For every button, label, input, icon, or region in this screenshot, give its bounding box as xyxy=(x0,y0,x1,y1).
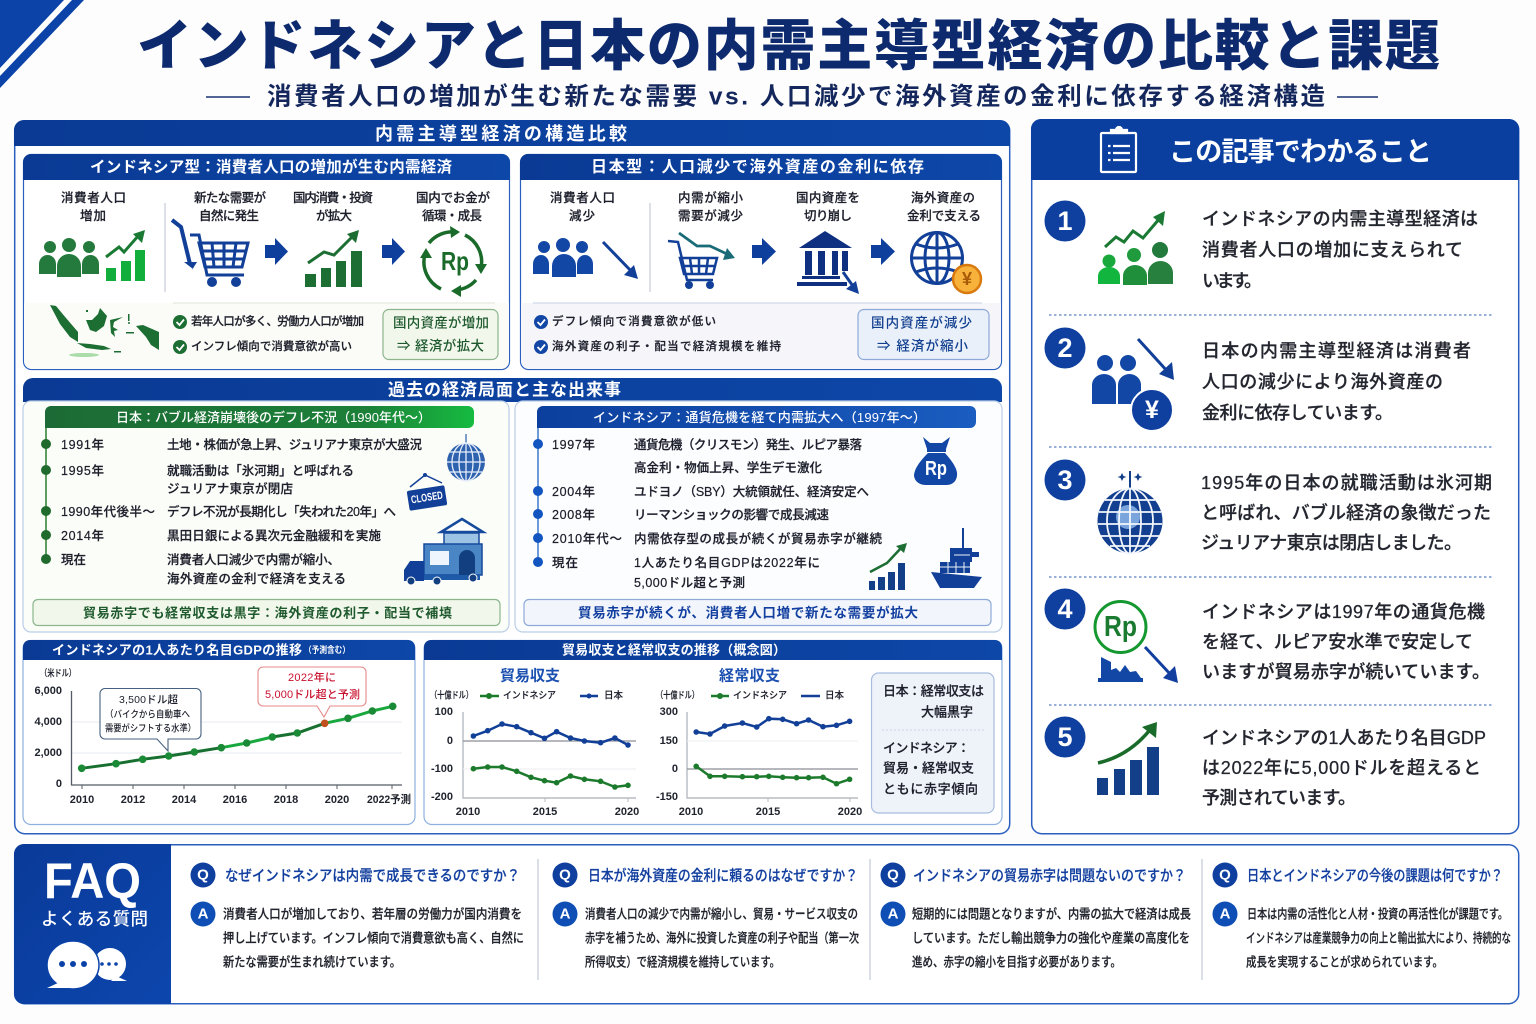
panel: Indonesia timeline xyxy=(515,401,1002,632)
chart: current account: 2010 xyxy=(679,806,703,818)
timeline rows: 5,000ドル超と予測 xyxy=(634,575,745,590)
heading: what you learn xyxy=(1031,119,1519,180)
check list: 若年人口が多く、労働力人口が増加 xyxy=(191,314,364,328)
chart: current account: 150 xyxy=(660,735,678,747)
line chart: 2022予測 xyxy=(367,792,411,806)
timeline rows: 高金利・物価上昇、学生デモ激化 xyxy=(634,460,822,475)
heading: what you learn: この記事でわかること xyxy=(1169,137,1432,167)
timeline rows: 現在 xyxy=(552,555,578,570)
flow labels: 増加 xyxy=(80,208,106,223)
FAQ 3: インドネシアの貿易赤字は問題ないのですか？ xyxy=(913,868,1186,884)
icon: rupiah cycle xyxy=(420,226,487,297)
line chart: 6,000 xyxy=(34,685,62,697)
callout: domestic assets rise: ⇒ 経済が拡大 xyxy=(397,338,484,354)
heading: Japan timeline xyxy=(45,406,474,428)
callout: domestic assets fall xyxy=(858,310,989,360)
heading: balance charts: 貿易収支と経常収支の推移（概念図） xyxy=(562,642,786,658)
callout: chart summary: 貿易・経常収支 xyxy=(883,760,974,776)
icon: clipboard xyxy=(1101,127,1136,172)
FAQ 1 xyxy=(190,862,524,970)
item 1: 1 xyxy=(1057,206,1073,236)
callout: 2022 forecast: 2022年に xyxy=(288,670,336,684)
line chart: 2020 xyxy=(325,794,349,806)
flow labels: 海外資産の xyxy=(911,190,975,205)
callout: chart summary: インドネシア： xyxy=(883,740,970,756)
icon: container ship xyxy=(931,528,982,588)
icon: Indonesia map xyxy=(50,305,159,357)
timeline rows: 1997年 xyxy=(552,438,595,452)
heading: past economic phases xyxy=(23,378,1002,402)
check list xyxy=(173,314,364,354)
icon: rising bars xyxy=(305,230,362,287)
flow labels: 内需が縮小 xyxy=(678,190,743,205)
timeline rows: ジュリアナ東京が閉店 xyxy=(167,481,293,496)
item 5 xyxy=(1044,716,1486,808)
arrow xyxy=(752,238,776,265)
chart: trade balance: 貿易収支 xyxy=(500,666,560,684)
icon: cart with falling line xyxy=(668,233,735,289)
flow labels: が拡大 xyxy=(316,208,352,223)
flow labels: 国内消費・投資 xyxy=(293,190,373,205)
timeline rows: 2010年代～ xyxy=(552,532,622,546)
icon: globe and yen xyxy=(912,232,981,293)
timeline rows: 内需依存型の成長が続くが貿易赤字が継続 xyxy=(634,531,882,546)
heading: balance charts xyxy=(424,640,1002,660)
line chart: 2018 xyxy=(274,794,298,806)
callout: 2022 forecast: 5,000ドル超と予測 xyxy=(265,687,360,701)
item 1: 消費者人口の増加に支えられて xyxy=(1202,240,1463,260)
flow labels: 切り崩し xyxy=(804,208,852,223)
FAQ 3: しています。ただし輸出競争力の強化や産業の高度化を xyxy=(912,930,1190,946)
FAQ 3 xyxy=(880,862,1191,970)
check list: デフレ傾向で消費意欲が低い xyxy=(552,314,716,328)
panel: GDP chart xyxy=(23,640,415,824)
line chart: 4,000 xyxy=(34,716,62,728)
chart: trade balance: 0 xyxy=(447,735,453,747)
timeline rows xyxy=(533,428,882,590)
chart: trade balance: 100 xyxy=(435,706,453,718)
heading: GDP chart: インドネシアの1人あたり名目GDPの推移 xyxy=(52,642,302,658)
chart: trade balance: （十億ドル） xyxy=(430,690,473,702)
callout: chart summary xyxy=(872,673,994,813)
callout: 3,500 dollars xyxy=(100,688,201,751)
chart: current account: 2015 xyxy=(756,806,780,818)
FAQ 4: A xyxy=(1220,906,1231,922)
chart: current account xyxy=(656,668,862,818)
panel: Indonesia type: インドネシア型：消費者人口の増加が生む内需経済 xyxy=(90,157,452,176)
chart: current account: 300 xyxy=(660,706,678,718)
FAQ 3: 進め、赤字の縮小を目指す必要があります。 xyxy=(912,954,1121,970)
timeline rows: 1人あたり名目GDPは2022年に xyxy=(634,555,820,570)
icon: people decline and yen: ¥ xyxy=(1145,396,1159,424)
chart: current account: 日本 xyxy=(825,690,844,702)
icon: growth arrow and bars xyxy=(1097,722,1159,795)
item 3: と呼ばれ、バブル経済の象徴だった xyxy=(1201,502,1491,523)
FAQ 3: Q xyxy=(887,866,899,884)
item 1: います。 xyxy=(1202,271,1262,291)
FAQ 1: 消費者人口が増加しており、若年層の労働力が国内消費を xyxy=(223,906,522,922)
heading: GDP chart: （予測含む） xyxy=(304,644,350,655)
icon: closed sign: CLOSED xyxy=(410,490,444,506)
callout: domestic assets rise: 国内資産が増加 xyxy=(393,314,489,330)
icon: rupiah money bag: Rp xyxy=(925,458,947,480)
item 3 xyxy=(1044,460,1492,554)
timeline rows: 1991年 xyxy=(61,438,104,452)
callout: Indonesia summary xyxy=(524,600,991,626)
item 5: 5 xyxy=(1057,722,1073,752)
icon: rupiah depreciation: Rp xyxy=(1104,611,1137,643)
icon: globe and yen: ¥ xyxy=(962,269,972,289)
item 5: は2022年に5,000ドルを超えると xyxy=(1202,758,1481,778)
icon: rupiah depreciation xyxy=(1095,602,1178,683)
chart: current account: 経常収支 xyxy=(719,668,780,684)
callout: domestic assets rise xyxy=(383,310,498,360)
chart: trade balance: インドネシア xyxy=(503,690,556,702)
heading: Indonesia timeline xyxy=(537,406,976,428)
item 4: を経て、ルピア安水準で安定して xyxy=(1202,632,1473,652)
item 3: 1995年の日本の就職活動は氷河期 xyxy=(1201,473,1492,493)
line chart: 2014 xyxy=(172,794,197,806)
FAQ badge: FAQ xyxy=(44,853,141,909)
icon: disco ball xyxy=(447,434,485,481)
FAQ 3: 短期的には問題となりますが、内需の拡大で経済は成長 xyxy=(912,906,1191,922)
FAQ badge xyxy=(14,844,171,1004)
line chart: （米ドル） xyxy=(40,668,76,680)
flow labels: 金利で支える xyxy=(907,208,981,223)
icon: people and growth xyxy=(1098,211,1173,285)
heading: GDP chart xyxy=(23,640,415,660)
panel: trade and current account charts xyxy=(424,640,1002,824)
FAQ 2: 日本が海外資産の金利に頼るのはなぜですか？ xyxy=(588,866,858,884)
FAQ 1: Q xyxy=(197,866,209,884)
item 5: インドネシアの1人あたり名目GDP xyxy=(1202,728,1486,748)
callout: Japan summary xyxy=(33,600,500,626)
icon: bank with down arrow xyxy=(797,231,859,294)
panel: FAQ xyxy=(14,844,1519,1004)
line chart: 2,000 xyxy=(34,747,62,759)
icon: people decline and yen xyxy=(1092,339,1174,431)
callout: domestic assets fall: 国内資産が減少 xyxy=(871,314,972,330)
chart: trade balance: 日本 xyxy=(604,690,623,702)
icon: growth chart xyxy=(869,543,907,590)
FAQ 4: Q xyxy=(1219,866,1231,884)
chart: current account: （十億ドル） xyxy=(656,690,699,702)
item 2: 日本の内需主導型経済は消費者 xyxy=(1202,341,1471,361)
flow labels: 国内資産を xyxy=(796,190,860,205)
chart: current account: インドネシア xyxy=(733,690,787,702)
timeline rows: 土地・株価が急上昇、ジュリアナ東京が大盛況 xyxy=(167,437,422,452)
line chart: 0 xyxy=(56,778,62,790)
line chart: 2010 xyxy=(70,794,94,806)
flow labels: 需要が減少 xyxy=(678,208,743,223)
callout: Japan summary: 貿易赤字でも経常収支は黒字：海外資産の利子・配当で補填 xyxy=(83,606,452,620)
arrow xyxy=(265,238,288,265)
flow labels: 消費者人口 xyxy=(550,190,615,205)
item 4: インドネシアは1997年の通貨危機 xyxy=(1202,602,1485,622)
chart: current account: 2020 xyxy=(838,806,862,818)
item 4: いますが貿易赤字が続いています。 xyxy=(1202,661,1490,682)
timeline rows: 就職活動は「氷河期」と呼ばれる xyxy=(167,463,354,478)
icon: chat bubbles xyxy=(47,941,127,989)
callout: 3,500 dollars: （バイクから自動車へ xyxy=(105,708,190,720)
chart: trade balance: 2020 xyxy=(615,806,639,818)
timeline rows: 現在 xyxy=(61,552,86,567)
item 4: 4 xyxy=(1057,594,1073,624)
panel: Japan timeline xyxy=(23,401,509,632)
item 2 xyxy=(1044,328,1471,431)
icon: store and truck xyxy=(404,519,483,585)
flow labels: 国内でお金が xyxy=(416,190,490,205)
chart: trade balance: 2010 xyxy=(456,806,480,818)
icon: growing population xyxy=(39,230,145,281)
timeline rows: 1995年 xyxy=(61,464,104,478)
timeline rows: 1990年代後半～ xyxy=(61,504,155,519)
arrow xyxy=(871,238,895,265)
title: インドネシアと日本の内需主導型経済の比較と課題 xyxy=(137,15,1440,77)
callout: domestic assets fall: ⇒ 経済が縮小 xyxy=(877,338,968,354)
item 2: 金利に依存しています。 xyxy=(1202,403,1393,423)
chart: current account: 0 xyxy=(672,763,678,775)
callout: chart summary: 日本：経常収支は xyxy=(883,684,984,698)
timeline rows: 消費者人口減少で内需が縮小、 xyxy=(167,552,340,567)
panel: Japan type: 日本型：人口減少で海外資産の金利に依存 xyxy=(591,157,924,176)
FAQ 2: 所得収支）で経済規模を維持しています。 xyxy=(585,954,780,970)
FAQ 2: 赤字を補うため、海外に投資した資産の利子や配当（第一次 xyxy=(585,930,859,946)
callout: chart summary: ともに赤字傾向 xyxy=(883,782,978,796)
chart: trade balance: -100 xyxy=(431,763,453,775)
heading: Japan timeline: 日本：バブル経済崩壊後のデフレ不況（1990年代～） xyxy=(116,410,431,425)
panel: Japan type xyxy=(520,154,1002,370)
flow labels xyxy=(550,190,981,223)
heading: past economic phases: 過去の経済局面と主な出来事 xyxy=(388,380,621,400)
FAQ 1: なぜインドネシアは内需で成長できるのですか？ xyxy=(225,868,520,884)
heading: structure comparison: 内需主導型経済の構造比較 xyxy=(375,124,627,144)
arrow xyxy=(382,238,405,265)
panel: Indonesia type xyxy=(23,154,510,370)
flow labels: 新たな需要が xyxy=(194,190,266,205)
FAQ 2: 消費者人口の減少で内需が縮小し、貿易・サービス収支の xyxy=(585,906,858,922)
FAQ badge: よくある質問 xyxy=(41,909,148,929)
FAQ 2: A xyxy=(560,906,571,922)
check list: インフレ傾向で消費意欲が高い xyxy=(191,339,352,353)
FAQ 2: Q xyxy=(559,866,571,884)
callout: 3,500 dollars: 需要がシフトする水準） xyxy=(105,722,196,734)
heading: structure comparison xyxy=(14,120,1010,146)
check list xyxy=(534,314,782,354)
timeline rows: 黒田日銀による異次元金融緩和を実施 xyxy=(167,528,381,543)
icon: shrinking population xyxy=(533,238,638,279)
flow labels: 自然に発生 xyxy=(199,208,259,223)
panel: what you learn xyxy=(1031,119,1519,834)
line chart xyxy=(34,668,411,806)
FAQ 2 xyxy=(552,862,859,970)
heading: Indonesia timeline: インドネシア：通貨危機を経て内需拡大へ（1997年～） xyxy=(593,410,926,425)
panel: structure and history main panel xyxy=(14,120,1010,834)
timeline rows: 通貨危機（クリスモン）発生、ルピア暴落 xyxy=(634,437,862,452)
corner accent xyxy=(0,0,84,88)
timeline rows: 2004年 xyxy=(552,485,595,499)
FAQ 1: 押し上げています。インフレ傾向で消費意欲も高く、自然に xyxy=(223,930,524,946)
timeline rows: デフレ不況が長期化し「失われた20年」へ xyxy=(167,504,396,519)
flow labels: 消費者人口 xyxy=(61,190,126,205)
subtitle: 消費者人口の増加が生む新たな需要 vs. 人口減少で海外資産の金利に依存する経済構造 xyxy=(267,82,1325,110)
line chart: 2016 xyxy=(223,794,247,806)
chart: trade balance: -200 xyxy=(431,791,453,803)
timeline rows: ユドヨノ（SBY）大統領就任、経済安定へ xyxy=(634,484,869,499)
timeline rows: 海外資産の金利で経済を支える xyxy=(167,571,346,586)
flow labels: 減少 xyxy=(569,208,595,223)
chart: trade balance xyxy=(430,666,639,818)
FAQ 1: A xyxy=(198,906,209,922)
item 3: 3 xyxy=(1057,465,1073,495)
timeline rows: リーマンショックの影響で成長減速 xyxy=(634,507,829,522)
item 5: 予測されています。 xyxy=(1202,788,1356,808)
FAQ 4: 成長を実現することが求められています。 xyxy=(1246,954,1443,970)
FAQ 1: 新たな需要が生まれ続けています。 xyxy=(223,954,401,970)
flow labels: 循環・成長 xyxy=(422,208,482,223)
chart: current account: -150 xyxy=(656,791,678,803)
item 2: 人口の減少により海外資産の xyxy=(1202,372,1443,392)
flow labels xyxy=(61,190,490,223)
icon: disco ball xyxy=(1098,471,1162,554)
callout: Indonesia summary: 貿易赤字が続くが、消費者人口増で新たな需要が拡大 xyxy=(578,604,918,620)
callout: 2022 forecast xyxy=(258,667,366,717)
item 2: 2 xyxy=(1057,333,1073,363)
FAQ 4 xyxy=(1212,862,1511,970)
icon: closed sign xyxy=(407,473,447,511)
line chart: 2012 xyxy=(121,794,145,806)
timeline rows: 2008年 xyxy=(552,508,595,522)
item 4 xyxy=(1044,588,1490,683)
item 1: インドネシアの内需主導型経済は xyxy=(1202,209,1478,229)
icon: rupiah cycle: Rp xyxy=(441,246,469,276)
icon: cart with down arrow xyxy=(172,220,248,287)
callout: chart summary: 大幅黒字 xyxy=(921,704,973,720)
callout: 3,500 dollars: 3,500ドル超 xyxy=(119,693,178,706)
item 3: ジュリアナ東京は閉店しました。 xyxy=(1201,533,1462,553)
icon: rupiah money bag xyxy=(914,437,957,485)
timeline rows xyxy=(41,428,422,586)
timeline rows: 2014年 xyxy=(61,529,104,543)
item 1 xyxy=(1044,200,1478,291)
check list: 海外資産の利子・配当で経済規模を維持 xyxy=(552,339,782,353)
FAQ 3: A xyxy=(888,906,899,922)
chart: trade balance: 2015 xyxy=(533,806,557,818)
